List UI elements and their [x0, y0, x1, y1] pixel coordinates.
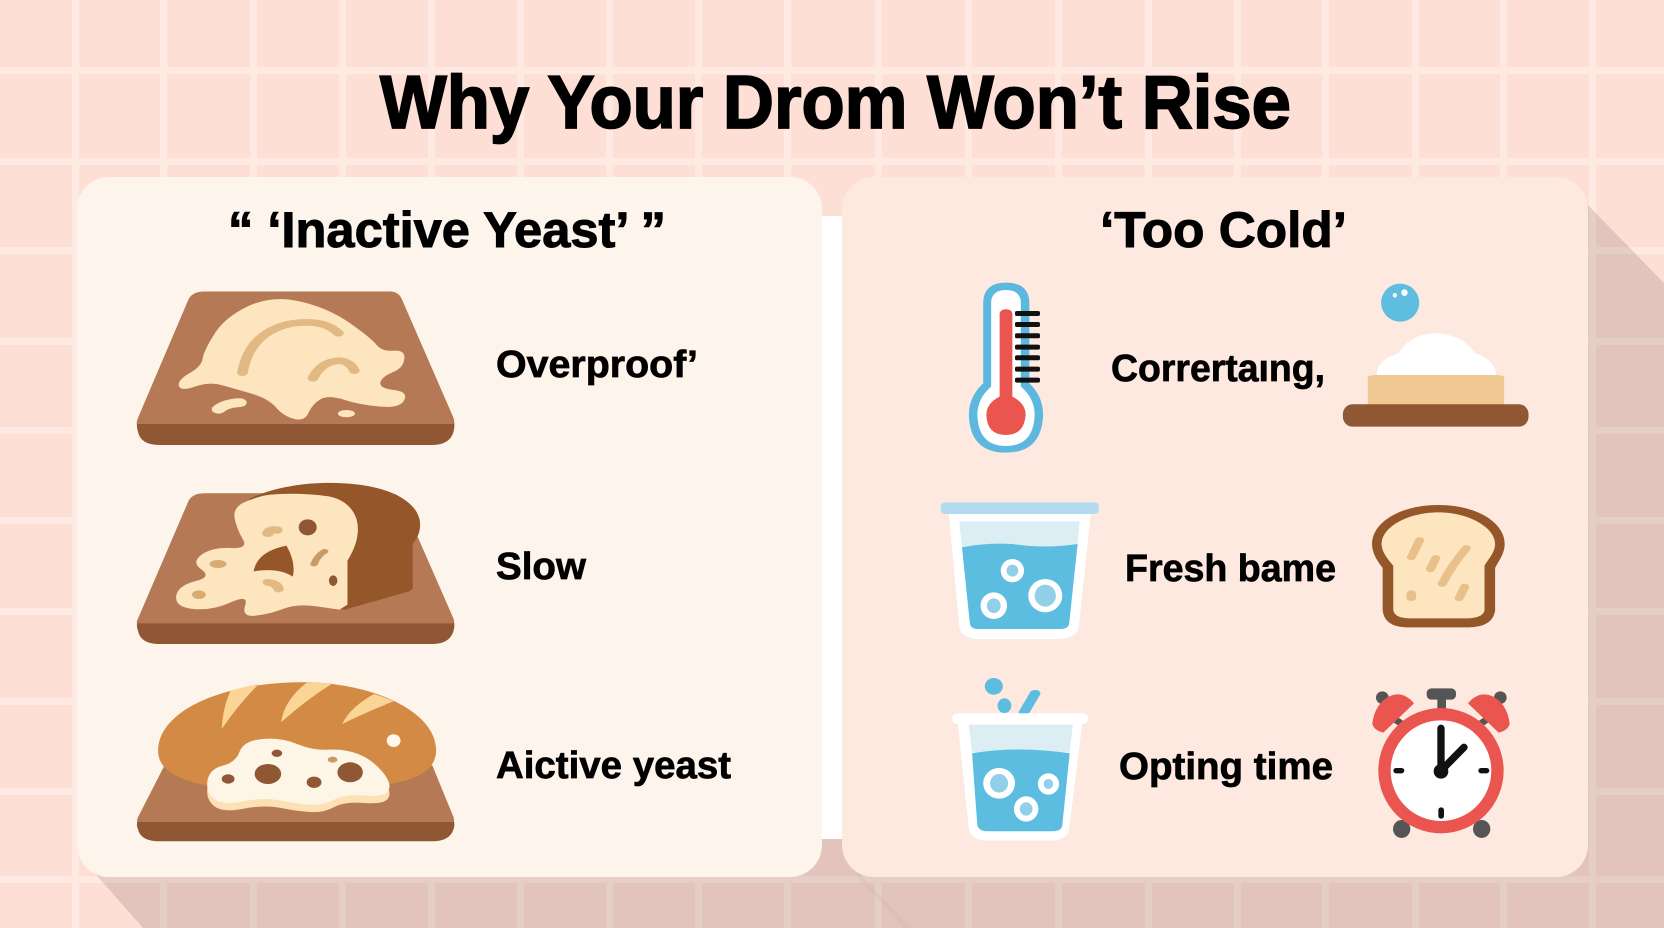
- icon: bread slice: [1372, 505, 1505, 627]
- icon: cup of water with splashes: [952, 678, 1088, 841]
- icon: collapsed dough on board: [137, 292, 454, 445]
- icon: thermometer: [969, 283, 1043, 453]
- icon: alarm clock: [1372, 688, 1510, 838]
- label: opting time: Opting time: [1119, 746, 1333, 788]
- heading: too cold: ‘Too Cold’: [1100, 202, 1347, 258]
- label: slow: Slow: [496, 546, 586, 588]
- panel: inactive yeast: [77, 177, 822, 877]
- label: aictive yeast: Aictive yeast: [496, 745, 731, 787]
- icon: loaf with gummy crumb on board: [137, 682, 454, 841]
- icon: cup of water with lid: [941, 502, 1099, 639]
- label: overproof: Overproof’: [496, 344, 698, 386]
- label: fresh bame: Fresh bame: [1125, 548, 1336, 590]
- title: Why Your Drom Won’t Rise: [380, 60, 1291, 144]
- panel: too cold: [842, 177, 1588, 877]
- icon: water drop over proofing dough: [1343, 284, 1529, 427]
- heading: inactive yeast: “ ‘Inactive Yeast’ ”: [228, 202, 666, 258]
- icon: sunken loaf on board: [137, 483, 454, 644]
- label: correrta: Corrertaıng,: [1111, 348, 1325, 390]
